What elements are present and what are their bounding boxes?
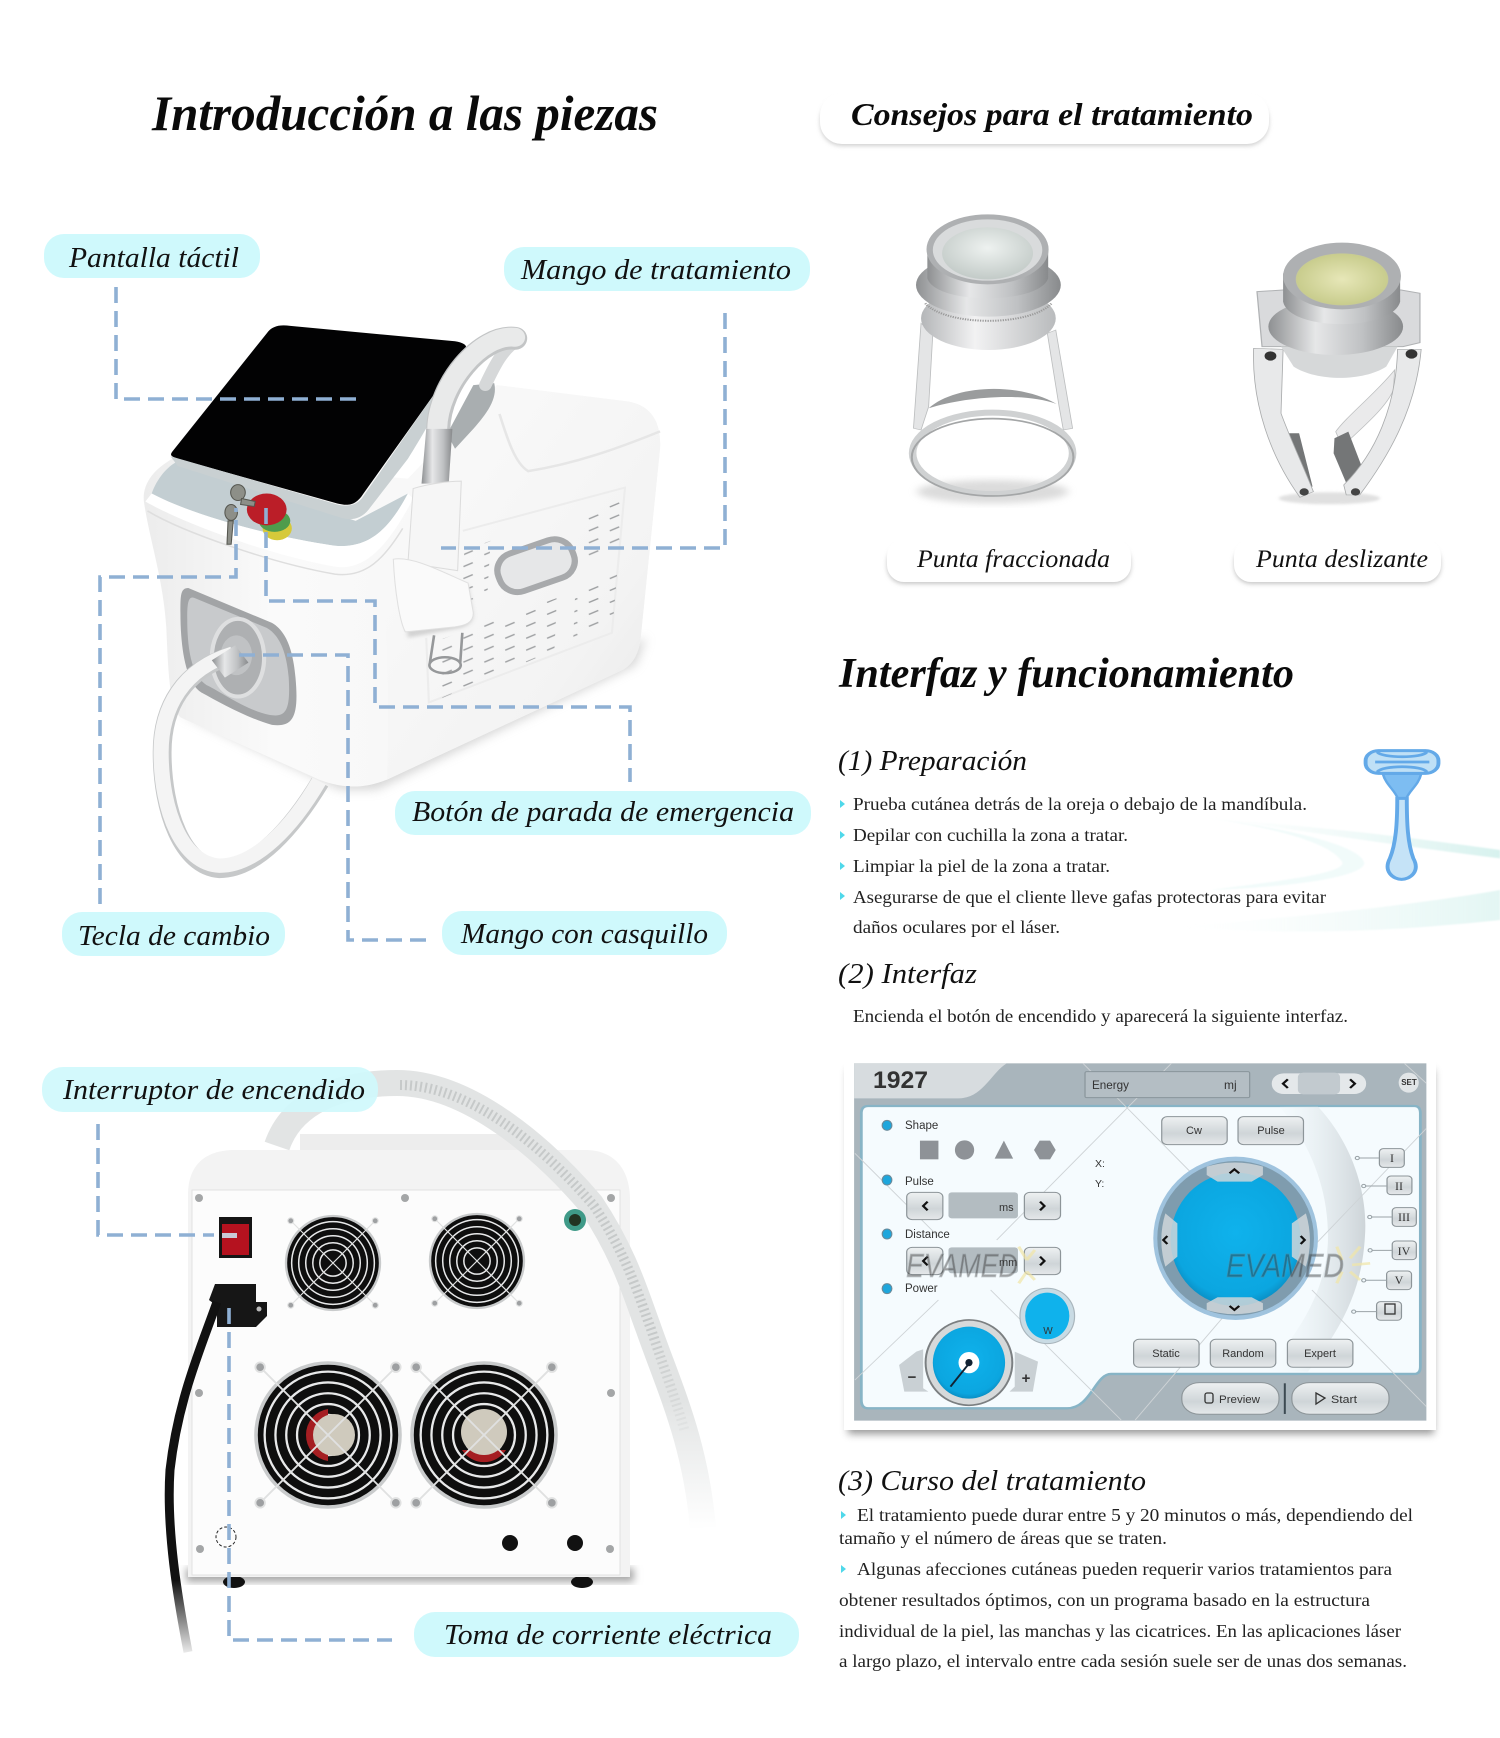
text block: treatment course [839,1505,1413,1671]
list: preparation steps: Prueba cutánea detrás de la oreja o debajo de la mandíbula. [853,794,1307,814]
tip illustration: fractional tip [912,214,1073,503]
label: touch screen: Pantalla táctil [68,242,239,274]
interface text labels: Start [1331,1394,1357,1406]
interface text labels: III [1398,1210,1410,1224]
interface text labels: 1927 [873,1067,928,1094]
text block: treatment course: a largo plazo, el intervalo entre cada sesión suele ser de unas dos semanas. [839,1651,1407,1671]
interface text labels: IV [1398,1244,1411,1258]
label: power socket [414,1612,799,1657]
label: fractional tip: Punta fraccionada [916,546,1110,573]
list: preparation steps: Depilar con cuchilla la zona a tratar. [853,825,1128,845]
interface text labels: Pulse [905,1176,934,1188]
interface text labels: EVAMED [1226,1247,1344,1284]
interface text labels: Cw [1186,1125,1202,1137]
vents are part of the device [431,498,623,702]
list: preparation steps [840,794,1326,937]
label: sliding tip: Punta deslizante [1255,546,1428,573]
label: power switch: Interruptor de encendido [62,1074,365,1106]
label: key switch [62,912,285,956]
tip illustration: sliding tip [1253,243,1421,504]
device illustration: rear view [169,1083,703,1652]
interface text labels: II [1395,1179,1403,1193]
label: treatment handle: Mango de tratamiento [520,254,791,286]
text block: treatment course: obtener resultados óptimos, con un programa basado en la estructura [839,1590,1370,1610]
list: preparation steps: Asegurarse de que el cliente lleve gafas protectoras para evitar [853,887,1326,907]
heading pill: treatment tips [820,93,1269,146]
icon: razor [1366,751,1438,879]
connector lines: rear view [98,1124,392,1640]
text block: treatment course: tamaño y el número de áreas que se traten. [839,1528,1167,1548]
interface text labels: Power [905,1283,938,1295]
interface text labels: Pulse [1257,1125,1285,1137]
label: emergency stop: Botón de parada de emergencia [412,796,794,828]
interface text labels: I [1390,1151,1394,1165]
interface text labels: Random [1222,1348,1264,1360]
label: treatment handle [504,247,810,291]
label: sleeve handle: Mango con casquillo [460,918,708,950]
device illustration: front view [144,325,660,869]
interface text labels: Y: [1095,1178,1104,1190]
interface text labels: Expert [1304,1348,1336,1360]
title: parts introduction: Introducción a las piezas [151,85,658,141]
label: sliding tip [1234,539,1441,584]
interface text labels: mj [1224,1078,1237,1092]
text block: treatment course: El tratamiento puede durar entre 5 y 20 minutos o más, dependiendo del [857,1505,1413,1525]
subheading: preparation: (1) Preparación [838,746,1027,777]
interface text labels: mm [999,1257,1017,1269]
heading: interface and operation: Interfaz y funcionamiento [838,651,1294,697]
interface text labels: X: [1095,1158,1105,1170]
interface text labels [873,1067,1417,1406]
interface text labels: Energy [1092,1078,1129,1092]
label: key switch: Tecla de cambio [78,920,270,952]
background swooshes [1180,818,1500,932]
interface text labels: EVAMED [906,1247,1018,1284]
label: power switch [42,1067,378,1112]
label: sleeve handle [442,911,727,955]
interface text labels: ms [999,1202,1014,1214]
interface text labels: Preview [1219,1394,1260,1406]
interface text labels: Distance [905,1229,950,1241]
interface text labels: W [1043,1326,1053,1337]
label: fractional tip [887,539,1131,584]
interface text labels: Static [1152,1348,1180,1360]
label: power socket: Toma de corriente eléctrica [444,1619,772,1651]
heading pill: treatment tips: Consejos para el tratamiento [851,96,1253,132]
text block: treatment course: Algunas afecciones cutáneas pueden requerir varios tratamientos para [857,1559,1392,1579]
text block: treatment course: individual de la piel, las manchas y las cicatrices. En las aplicaciones láser [839,1621,1401,1641]
text: power on instruction: Encienda el botón de encendido y aparecerá la siguiente interfaz. [853,1006,1348,1026]
list: preparation steps: daños oculares por el láser. [853,917,1060,937]
panel: machine interface screenshot [844,1056,1436,1434]
connector lines: front view [100,287,725,940]
interface text labels: − [908,1369,917,1386]
label: touch screen [44,234,260,278]
list: preparation steps: Limpiar la piel de la zona a tratar. [853,856,1110,876]
fans are drawn with shared rings and grilles [255,1214,557,1508]
subheading: treatment course: (3) Curso del tratamiento [838,1466,1146,1497]
interface text labels: + [1022,1370,1031,1387]
interface text labels: Shape [905,1120,938,1132]
interface text labels: SET [1401,1078,1417,1087]
label: emergency stop [395,791,811,835]
subheading: interface: (2) Interfaz [838,959,977,990]
interface text labels: V [1395,1273,1404,1287]
